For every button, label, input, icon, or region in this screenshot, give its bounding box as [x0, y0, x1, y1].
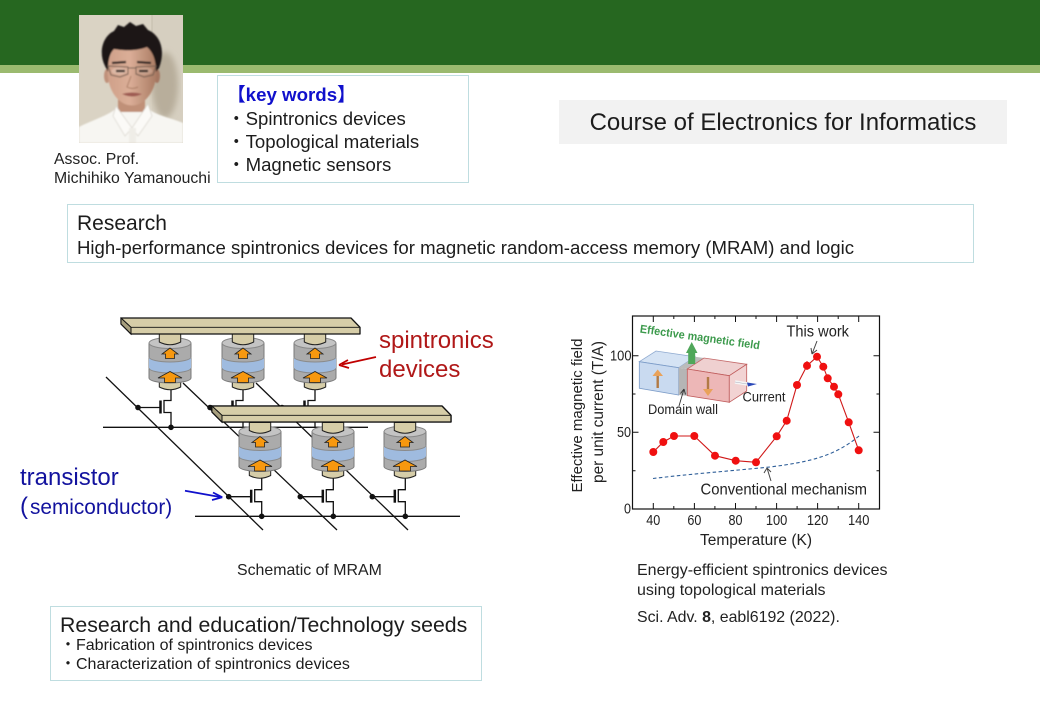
y axis tick labels: 50	[617, 425, 631, 441]
course title: Course of Electronics for Informatics	[590, 109, 976, 136]
transistor label	[20, 464, 172, 520]
x axis tick labels: 80	[728, 513, 742, 529]
y axis tick labels: 100	[610, 348, 632, 364]
header band	[0, 0, 1040, 73]
inset label: current: Current	[742, 390, 786, 404]
seeds list: ・Characterization of spintronics devices	[60, 656, 350, 673]
annotation: this work	[786, 324, 849, 354]
name caption	[54, 151, 211, 187]
key words heading: 【key words】	[227, 84, 356, 105]
panel: research	[67, 204, 974, 263]
spintronics devices label	[379, 327, 494, 382]
key words list: ・Spintronics devices	[227, 108, 406, 129]
y axis tick labels	[610, 348, 632, 518]
key words list	[227, 108, 419, 175]
panel: research: Research	[77, 212, 167, 235]
key words list: ・Magnetic sensors	[227, 154, 391, 175]
panel: research: High-performance spintronics devices for magnetic random-access memory (MRAM) and logic	[77, 236, 854, 258]
chart caption: using topological materials	[637, 582, 826, 599]
x axis tick labels	[646, 513, 869, 529]
panel: research and education	[50, 606, 482, 681]
inset label: domain wall: Domain wall	[648, 402, 718, 417]
panel heading: Research and education/Technology seeds	[60, 613, 467, 637]
seeds list	[60, 637, 350, 673]
plot frame	[632, 316, 880, 509]
y axis title: per unit current (T/A)	[590, 341, 607, 483]
chart caption	[637, 562, 888, 599]
course title	[559, 100, 1007, 144]
y axis title: Effective magnetic field	[569, 339, 586, 492]
key words list: ・Topological materials	[227, 131, 419, 152]
name caption: Assoc. Prof.	[54, 151, 139, 168]
panel: key words	[217, 75, 469, 183]
annotation: this work: This work	[786, 324, 849, 340]
portrait photo	[79, 15, 183, 143]
x axis tick labels: 60	[687, 513, 701, 529]
citation: Sci. Adv. 8, eabl6192 (2022).	[637, 609, 840, 626]
name caption: Michihiko Yamanouchi	[54, 170, 211, 187]
annotation: conventional mechanism	[700, 468, 867, 498]
conventional mechanism dashed curve	[653, 436, 859, 478]
x axis tick labels: 120	[807, 513, 828, 529]
y axis title	[569, 339, 607, 492]
spintronics devices label: devices	[379, 356, 460, 382]
chart caption: Energy-efficient spintronics devices	[637, 562, 888, 579]
x axis tick labels: 100	[766, 513, 787, 529]
seeds list: ・Fabrication of spintronics devices	[60, 637, 313, 654]
data series	[649, 353, 863, 466]
schematic caption: Schematic of MRAM	[237, 562, 382, 579]
x axis tick labels: 140	[848, 513, 869, 529]
inset label: effective magnetic field: Effective magnetic field	[639, 324, 761, 352]
y axis tick labels: 0	[624, 502, 631, 518]
transistor label: transistor	[20, 464, 119, 491]
transistor label: (semiconductor)	[20, 493, 172, 520]
x axis title: Temperature (K)	[700, 532, 812, 549]
spintronics devices label: spintronics	[379, 327, 494, 354]
inset: domain wall diagram	[639, 342, 757, 406]
annotation: conventional mechanism: Conventional mechanism	[700, 482, 867, 498]
x axis tick labels: 40	[646, 513, 660, 529]
